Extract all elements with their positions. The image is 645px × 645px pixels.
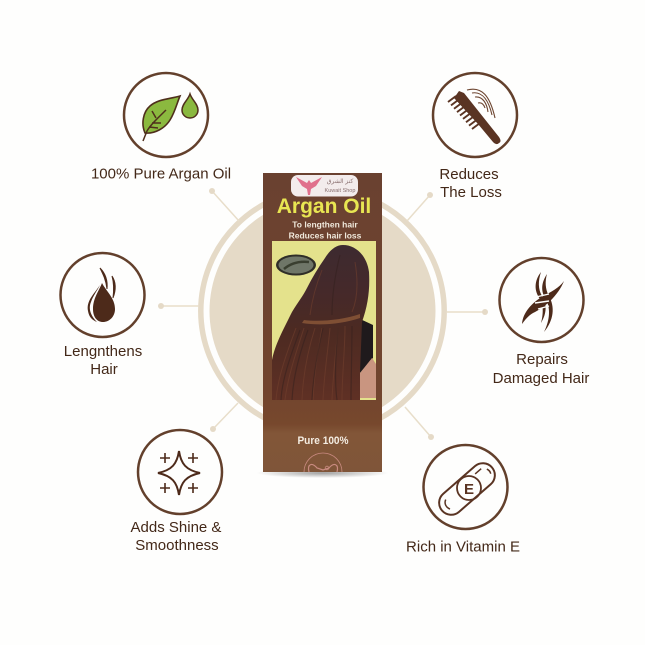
icon: comb with hair [433,73,517,157]
product subtitle [289,220,362,240]
icon: leaf and oil drop [124,73,208,157]
brand logo [291,175,358,196]
label: Hair [90,361,118,378]
label [64,343,142,378]
brand logo: كنز الشرق [327,178,353,185]
product box [256,173,388,478]
oval seed badge [276,254,316,276]
feature: reduces the loss [433,73,517,201]
connector: bottom left [210,403,238,432]
connector: top right [407,192,433,221]
product subtitle: Reduces hair loss [289,230,362,240]
label: Repairs [516,351,568,368]
feature: repairs damaged hair [493,258,589,387]
feature: rich in vitamin E [406,445,520,556]
label [493,351,589,387]
feature: adds shine and smoothness [131,430,222,554]
label: Smoothness [135,537,219,554]
label [131,519,221,554]
label: Adds Shine & [131,519,221,536]
connector: right [447,309,488,315]
feature: 100% pure argan oil [91,73,231,182]
connector: top left [209,188,239,221]
label: Damaged Hair [493,370,589,387]
icon: oil drop with hair [60,253,144,337]
label: Rich in Vitamin E [406,538,520,556]
label: The Loss [440,184,502,201]
seal emblem [304,453,342,472]
photo: woman with long hair [272,241,376,400]
purity label: Pure 100% [297,435,349,447]
icon: vitamin E capsule: E [464,481,474,498]
product subtitle: To lengthen hair [292,220,358,230]
label: 100% Pure Argan Oil [91,166,231,182]
icon: split hair strands [500,258,584,342]
label: Reduces [439,166,499,183]
connector: bottom right [405,407,434,440]
label [439,166,502,201]
label: Lengnthens [64,343,142,360]
connector: left [158,303,199,309]
feature: lengthens hair [60,253,144,378]
brand logo: Kuwait Shop [325,188,355,194]
central circle backdrop [201,189,444,433]
icon: sparkles [138,430,222,514]
product name: Argan Oil [277,195,371,218]
